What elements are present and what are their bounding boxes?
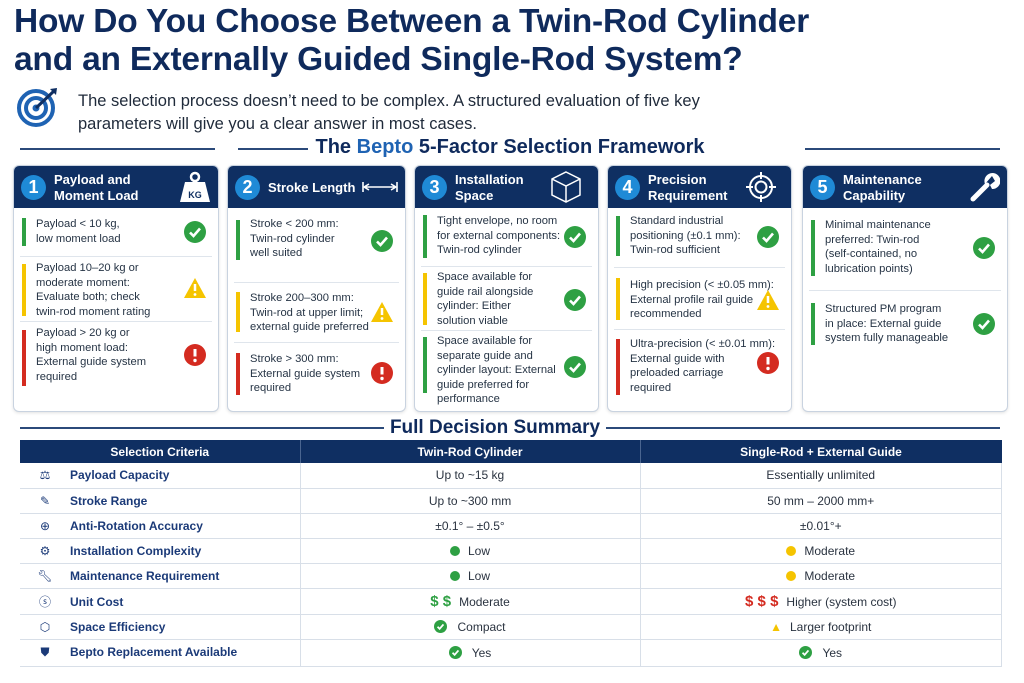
panel: stroke length: Stroke Length [268,180,355,195]
panel: stroke length [227,165,406,412]
panel: installation space: guide preferred for [437,378,529,390]
table: decision summary: Space Efficiency [70,620,165,634]
panel: stroke length: 2 [242,177,252,197]
panel: payload: high moment load: [36,342,128,354]
panel: payload: low moment load [36,232,121,244]
panel: stroke length: Stroke > 300 mm: [250,353,339,365]
icon: kg weight [180,172,210,202]
table: decision summary: Low [468,569,490,583]
panel: installation space: cylinder layout: External [437,364,556,376]
table: decision summary: Yes [472,646,491,660]
panel: installation space: guide rail alongside [437,286,533,298]
table: decision summary: Selection Criteria [110,444,209,458]
table: decision summary: Installation Complexity [70,544,201,558]
panel: payload: moderate moment: [36,276,130,288]
panel: stroke length: Twin-rod at upper limit; [250,306,363,318]
panel: installation space: solution viable [437,314,508,326]
table: decision summary: Yes [822,646,842,660]
table: decision summary: Low [468,544,490,558]
panel: payload: Payload > 20 kg or [36,327,130,339]
icon: wrench [970,173,1000,202]
subtitle text: The selection process doesn’t need to be complex. A structured evaluation of five key [78,92,700,110]
panel: installation space: performance [437,393,500,405]
panel: installation space: cylinder: Either [437,300,511,312]
panel: maintenance: Maintenance [843,172,922,187]
panel: precision: recommended [630,308,702,320]
panel: maintenance: system fully manageable [825,332,948,344]
panel: precision: required [630,382,671,394]
table: decision summary: ▲ Larger footprint [770,620,871,634]
icon: stroke arrow [362,182,398,192]
panel: precision: Twin-rod sufficient [630,244,720,256]
panel: installation space: Space available for [437,335,532,347]
panel: precision: 4 [622,177,632,197]
table: decision summary: ⊕ [40,519,50,533]
panel: maintenance [802,165,1008,412]
title [14,3,809,78]
table: decision summary: Bepto Replacement Available [70,645,237,659]
panel: payload: Evaluate both; check [36,291,140,303]
panel: installation space: 3 [429,177,440,197]
section heading: summary: Full Decision Summary [390,417,600,438]
table: decision summary: ±0.01°+ [800,519,842,533]
panel: payload: required [36,370,77,382]
icon: crosshair [746,172,776,202]
panel: maintenance: Structured PM program [825,303,941,315]
table: decision summary: Compact [457,620,506,634]
subtitle text: parameters will give you a clear answer in most cases. [78,115,477,133]
table: decision summary: 50 mm – 2000 mm+ [767,494,874,508]
panel: payload: Moment Load [54,188,138,203]
table: decision summary: Single-Rod + External Guide [740,444,902,458]
panel: precision [607,165,792,412]
table: decision summary: ⓢ [39,595,51,609]
panel: precision: External profile rail guide [630,294,753,306]
table: decision summary: Moderate [804,569,855,583]
panel: precision: Precision [648,172,707,187]
panel: stroke length: Twin-rod cylinder [250,232,335,244]
table: decision summary: $ $ Moderate [430,593,510,610]
panel: installation space: Tight envelope, no room [437,215,557,227]
table: decision summary: Anti-Rotation Accuracy [70,519,203,533]
panel: installation space: separate guide and [437,350,533,362]
panel: maintenance: Capability [843,188,905,203]
icon: cube [551,171,581,203]
table: decision summary: ±0.1° – ±0.5° [435,519,505,533]
panel: installation space [414,165,599,412]
panel: precision: Requirement [648,188,727,203]
panel: maintenance: Minimal maintenance [825,219,931,231]
panel: precision: preloaded carriage [630,367,723,379]
panel: maintenance: (self-contained, no [825,248,917,260]
panel: installation space: Space available for [437,271,532,283]
panel: payload: Payload 10–20 kg or [36,262,139,274]
table: decision summary: 🔧︎ [37,569,53,583]
panel: stroke length: Stroke < 200 mm: [250,218,339,230]
table: decision summary: Moderate [804,544,855,558]
panel: payload: Payload and [54,172,131,187]
panel: payload: External guide system [36,356,146,368]
table: decision summary: Essentially unlimited [766,468,875,482]
title: and an Externally Guided Single-Rod System? [14,41,743,78]
panel: stroke length: Stroke 200–300 mm: [250,292,354,304]
panel: installation space: Installation [455,172,524,187]
table: decision summary: Twin-Rod Cylinder [417,444,523,458]
panel: maintenance: preferred: Twin-rod [825,234,919,246]
panel: maintenance: in place: External guide [825,318,941,330]
panel: precision: External guide with [630,352,725,364]
table: decision summary: ⬡ [40,620,50,634]
subtitle text [78,92,700,133]
panel: maintenance: 5 [817,177,828,197]
table: decision summary: Up to ~300 mm [429,494,511,508]
table: decision summary: Maintenance Requirement [70,569,219,583]
panel: precision: Ultra-precision (< ±0.01 mm): [630,338,775,350]
panel: stroke length: well suited [250,247,302,259]
panel: installation space: Twin-rod cylinder [437,244,522,256]
table: decision summary: $ $ $ Higher (system cost) [745,593,896,610]
panel: stroke length: External guide system [250,368,360,380]
table: decision summary: ⚙ [40,544,50,558]
title: How Do You Choose Between a Twin-Rod Cylinder [14,3,809,40]
table: decision summary: ⚖ [40,468,50,482]
panel: installation space: for external components: [437,230,560,242]
section heading: framework: The Bepto 5-Factor Selection Framework [316,136,704,158]
icon: target [17,88,57,127]
table: decision summary: ✎ [40,494,50,508]
table: decision summary: ⛊ [40,645,50,659]
panel: stroke length: required [250,382,291,394]
panel: precision: High precision (< ±0.05 mm): [630,279,774,291]
table: decision summary: Payload Capacity [70,468,169,482]
panel: maintenance: lubrication points) [825,262,913,274]
icon: kg weight: KG [188,190,202,200]
panel: payload: twin-rod moment rating [36,306,150,318]
panel: precision: positioning (±0.1 mm): [630,230,741,242]
table: decision summary: Stroke Range [70,494,147,508]
panel: precision: Standard industrial [630,215,723,227]
table: decision summary: Unit Cost [70,595,123,609]
panel: payload: Payload < 10 kg, [36,218,120,230]
panel: payload [13,165,219,412]
panel: payload: 1 [28,177,38,197]
table: decision summary: Up to ~15 kg [436,468,504,482]
panel: stroke length: external guide preferred [250,321,369,333]
panel: installation space: Space [455,188,493,203]
table: decision summary [20,440,1002,667]
